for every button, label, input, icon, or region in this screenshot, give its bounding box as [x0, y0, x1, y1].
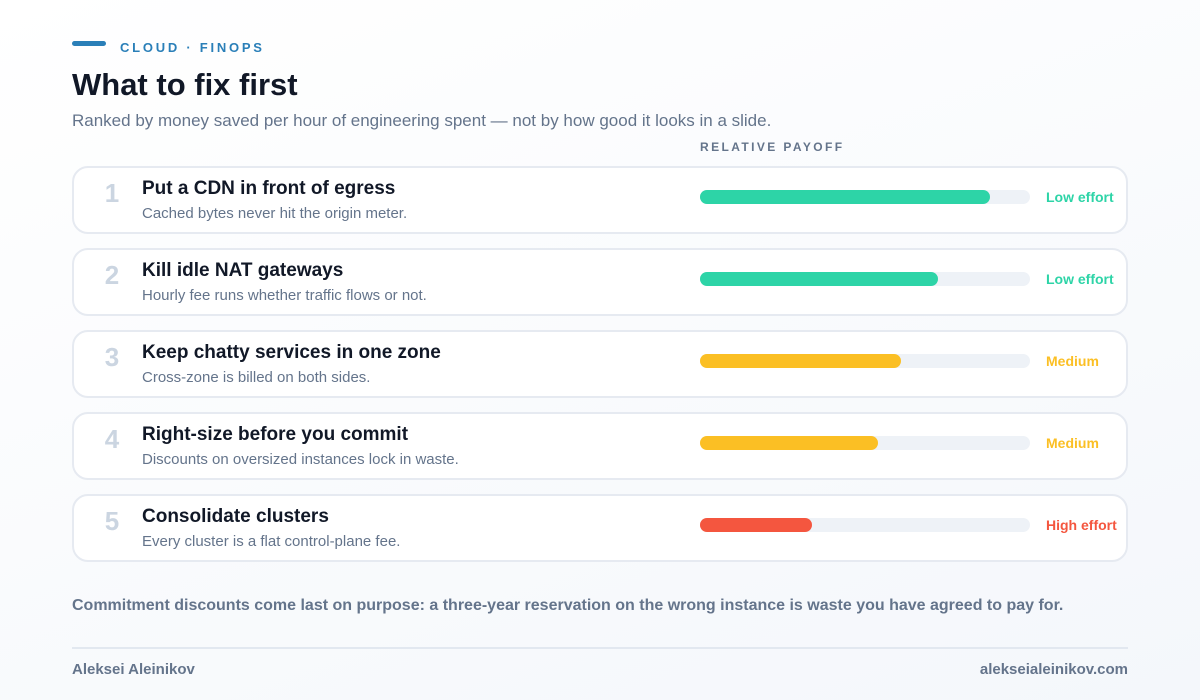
panel: item 2	[72, 248, 1128, 316]
item 4 description: Discounts on oversized instances lock in waste.	[142, 451, 459, 468]
column heading: relative payoff: RELATIVE PAYOFF	[700, 140, 844, 154]
rank 3: 3	[105, 342, 119, 372]
item 3 payoff bar	[700, 354, 1030, 368]
item 5 heading: Consolidate clusters	[142, 506, 329, 527]
takeaway note: Commitment discounts come last on purpose: a three-year reservation on the wrong instance is waste you have agreed to pay for.	[72, 597, 1063, 614]
item 2 heading: Kill idle NAT gateways	[142, 260, 343, 281]
item 3 effort label: Medium	[1046, 353, 1099, 369]
panel: item 1	[72, 166, 1128, 234]
item 4 effort label: Medium	[1046, 435, 1099, 451]
item 3 heading: Keep chatty services in one zone	[142, 342, 441, 363]
accent bar	[72, 41, 106, 46]
eyebrow label: CLOUD · FINOPS	[120, 40, 265, 55]
item 2 effort label: Low effort	[1046, 271, 1114, 287]
footer website: alekseialeinikov.com	[980, 661, 1128, 678]
item 2 payoff bar	[700, 272, 1030, 286]
item 5 payoff bar	[700, 518, 1030, 532]
item 3 description: Cross-zone is billed on both sides.	[142, 369, 370, 386]
item 5 effort label: High effort	[1046, 517, 1117, 533]
footer author: Aleksei Aleinikov	[72, 661, 195, 678]
rank 2: 2	[105, 260, 119, 290]
item 4 heading: Right-size before you commit	[142, 424, 408, 445]
rank 5: 5	[105, 506, 119, 536]
item 1 effort label: Low effort	[1046, 189, 1114, 205]
item 1 heading: Put a CDN in front of egress	[142, 178, 395, 199]
rank 1: 1	[105, 178, 119, 208]
item 1 description: Cached bytes never hit the origin meter.	[142, 205, 407, 222]
panel: item 3	[72, 330, 1128, 398]
item 1 payoff bar	[700, 190, 1030, 204]
subtitle: Ranked by money saved per hour of engineering spent — not by how good it looks in a slide.	[72, 111, 771, 130]
panel: item 5	[72, 494, 1128, 562]
item 5 description: Every cluster is a flat control-plane fee.	[142, 533, 400, 550]
rank 4: 4	[105, 424, 119, 454]
item 2 description: Hourly fee runs whether traffic flows or not.	[142, 287, 427, 304]
title: What to fix first	[72, 67, 298, 102]
item 4 payoff bar	[700, 436, 1030, 450]
panel: item 4	[72, 412, 1128, 480]
